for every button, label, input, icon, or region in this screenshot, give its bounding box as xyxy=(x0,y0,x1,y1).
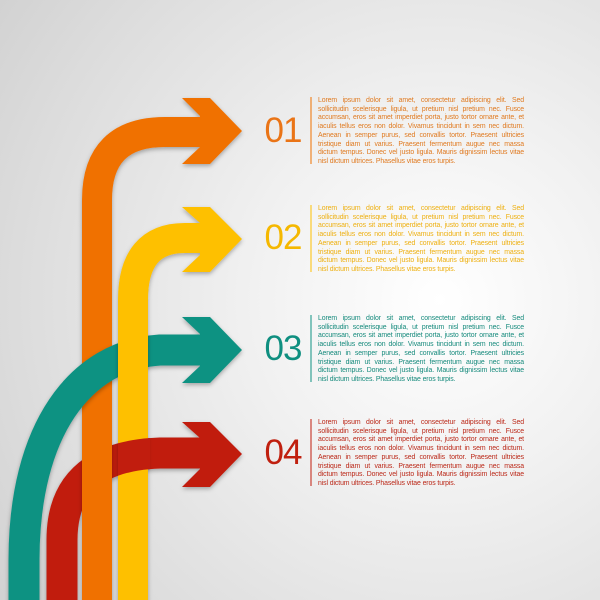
arrow: yellow 02 xyxy=(133,207,242,600)
text block 04: Lorem ipsum dolor sit amet, consectetur adipiscing elit. Sed sollicitudin scelerisque ligula, ut pretium nisl pretium nec. Fusce accumsan, eros sit amet imperdiet porta, justo tortor ornare ante, et iaculis tellus eros non dolor. Vivamus tincidunt in sem nec dictum. Aenean in semper purus, sed convallis tortor. Praesent ultricies tristique diam ut varius. Praesent fermentum augue nec massa dictum tempus. Donec vel justo ligula. Mauris dignissim lectus vitae nisl dictum ultrices. Phasellus vitae eros turpis. xyxy=(318,419,524,487)
arrow: teal 03 xyxy=(24,317,242,600)
number 01: 01 xyxy=(265,111,301,150)
arrow: orange 01 xyxy=(97,98,242,600)
number 03: 03 xyxy=(265,329,301,368)
number 04: 04 xyxy=(265,433,301,472)
text block 01: Lorem ipsum dolor sit amet, consectetur adipiscing elit. Sed sollicitudin scelerisque ligula, ut pretium nisl pretium nec. Fusce accumsan, eros sit amet imperdiet porta, justo tortor ornare ante, et iaculis tellus eros non dolor. Vivamus tincidunt in sem nec dictum. Aenean in semper purus, sed convallis tortor. Praesent ultricies tristique diam ut varius. Praesent fermentum augue nec massa dictum tempus. Donec vel justo ligula. Mauris dignissim lectus vitae nisl dictum ultrices. Phasellus vitae eros turpis. xyxy=(318,97,524,165)
text block 03: Lorem ipsum dolor sit amet, consectetur adipiscing elit. Sed sollicitudin scelerisque ligula, ut pretium nisl pretium nec. Fusce accumsan, eros sit amet imperdiet porta, justo tortor ornare ante, et iaculis tellus eros non dolor. Vivamus tincidunt in sem nec dictum. Aenean in semper purus, sed convallis tortor. Praesent ultricies tristique diam ut varius. Praesent fermentum augue nec massa dictum tempus. Donec vel justo ligula. Mauris dignissim lectus vitae nisl dictum ultrices. Phasellus vitae eros turpis. xyxy=(318,315,524,383)
arrows graphic xyxy=(6,97,312,600)
red band over yellow xyxy=(118,438,150,476)
dividers xyxy=(310,97,312,164)
text block 02: Lorem ipsum dolor sit amet, consectetur adipiscing elit. Sed sollicitudin scelerisque ligula, ut pretium nisl pretium nec. Fusce accumsan, eros sit amet imperdiet porta, justo tortor ornare ante, et iaculis tellus eros non dolor. Vivamus tincidunt in sem nec dictum. Aenean in semper purus, sed convallis tortor. Praesent ultricies tristique diam ut varius. Praesent fermentum augue nec massa dictum tempus. Donec vel justo ligula. Mauris dignissim lectus vitae nisl dictum ultrices. Phasellus vitae eros turpis. xyxy=(318,205,524,273)
arrow: red 04 (back) xyxy=(62,422,242,600)
number 02: 02 xyxy=(265,218,301,257)
